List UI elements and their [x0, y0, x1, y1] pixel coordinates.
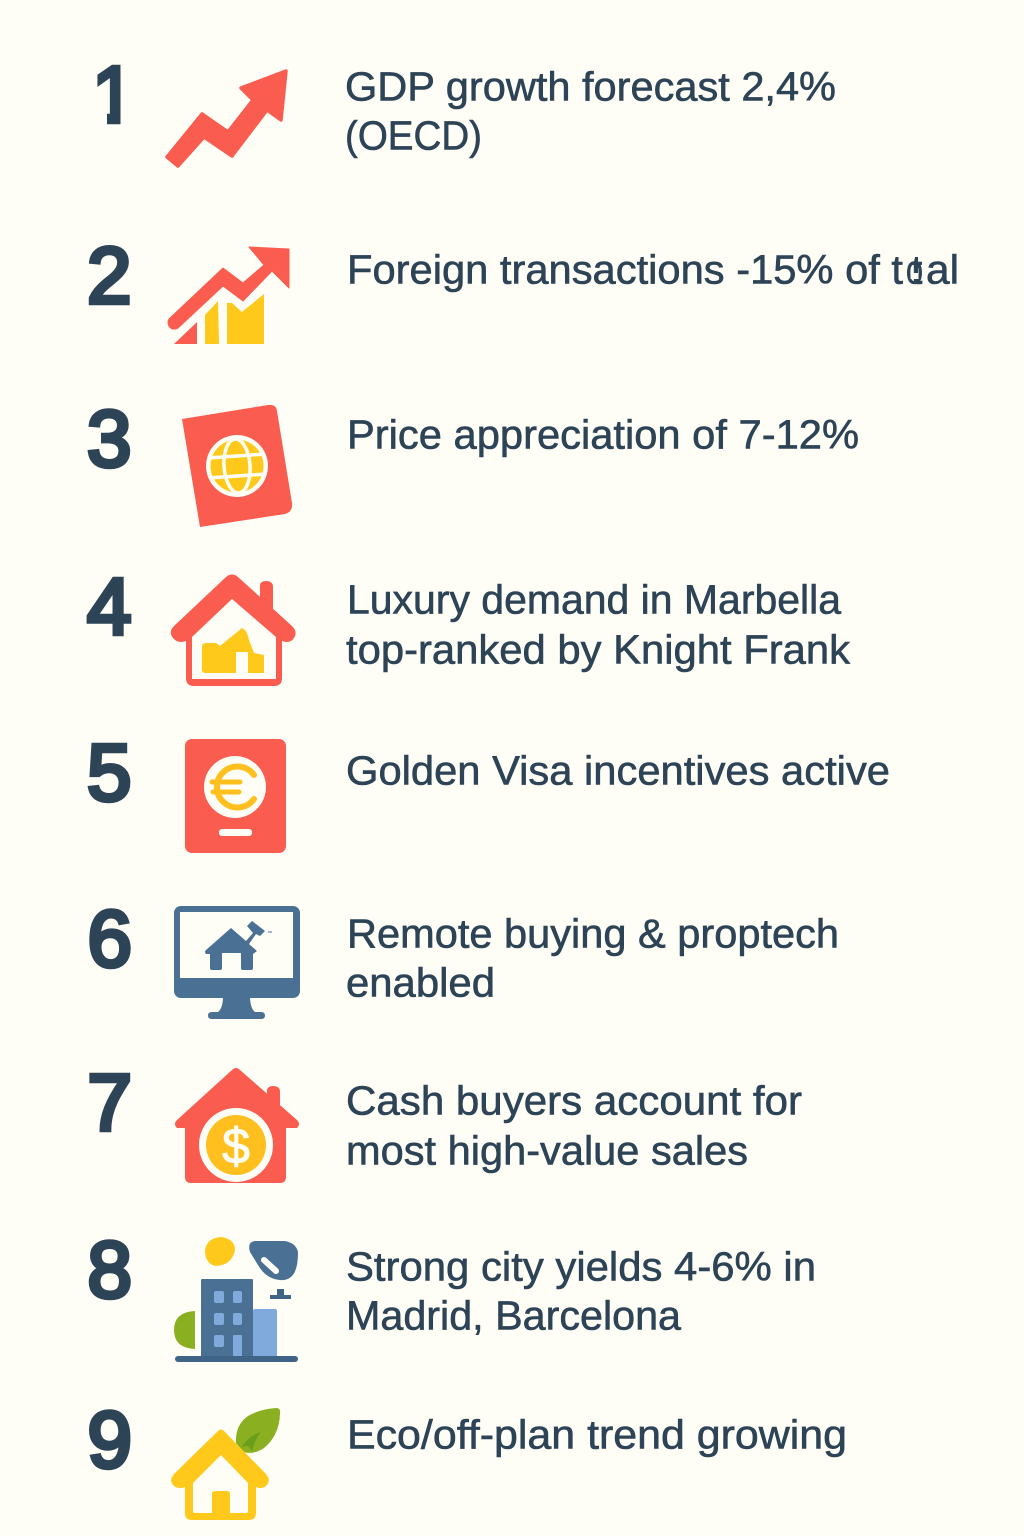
icon: passport with globe: [182, 405, 292, 527]
number 9: 9: [88, 1395, 132, 1484]
text: luxury demand: Luxury demand in Marbella: [347, 576, 841, 622]
row 4: luxury demand: [87, 562, 851, 686]
icon: house with leaf: [171, 1408, 280, 1520]
icon: house with skyline: [171, 574, 296, 686]
text: cash buyers: Cash buyers account for: [346, 1078, 802, 1124]
number 5: 5: [87, 728, 132, 817]
number 2: 2: [87, 231, 132, 320]
text: golden visa: Golden Visa incentives active: [346, 748, 890, 794]
row 6: remote buying: [88, 894, 839, 1019]
icon: euro passport: [185, 739, 286, 853]
row 3: price appreciation: [87, 394, 859, 527]
text: foreign transactions: Foreign transactions -15% of t: [347, 246, 904, 292]
text: cash buyers: most high-value sales: [346, 1128, 748, 1174]
icon: monitor with house: [174, 906, 300, 1019]
row 2: foreign transactions: [87, 231, 959, 344]
text: foreign transactions: al: [926, 246, 959, 292]
text: city yields: Strong city yields 4-6% in: [346, 1244, 816, 1290]
text: foreign transactions: o: [906, 246, 923, 292]
icon: rising arrow: [167, 71, 286, 166]
row 8: city yields: [88, 1225, 816, 1362]
text: GDP forecast: GDP growth forecast 2,4%: [345, 64, 836, 110]
row 7: cash buyers: [88, 1058, 802, 1183]
text: foreign transactions: t: [911, 246, 923, 292]
text: GDP forecast: (OECD): [345, 112, 482, 158]
text: remote buying: enabled: [346, 960, 495, 1006]
icon: house with dollar coin: [175, 1068, 299, 1183]
text: remote buying: Remote buying & proptech: [347, 910, 839, 956]
icon: house with dollar coin: $: [222, 1118, 250, 1174]
text: city yields: Madrid, Barcelona: [346, 1292, 681, 1338]
row 5: golden visa: [87, 728, 890, 853]
icon: arrow over bars: [168, 247, 289, 344]
number 1: 1: [92, 50, 136, 139]
text: luxury demand: top-ranked by Knight Frank: [346, 626, 851, 672]
text: eco trend: Eco/off-plan trend growing: [347, 1412, 847, 1458]
row 1: GDP growth: [97, 64, 835, 168]
row 9: eco trend: [88, 1395, 847, 1520]
number 3: 3: [87, 394, 132, 483]
number 7: 7: [88, 1058, 132, 1147]
number 4: 4: [87, 562, 132, 651]
icon: city buildings: [174, 1237, 298, 1362]
number 6: 6: [88, 894, 132, 983]
text: price appreciation: Price appreciation of 7-12%: [347, 412, 859, 458]
number 8: 8: [88, 1225, 132, 1314]
